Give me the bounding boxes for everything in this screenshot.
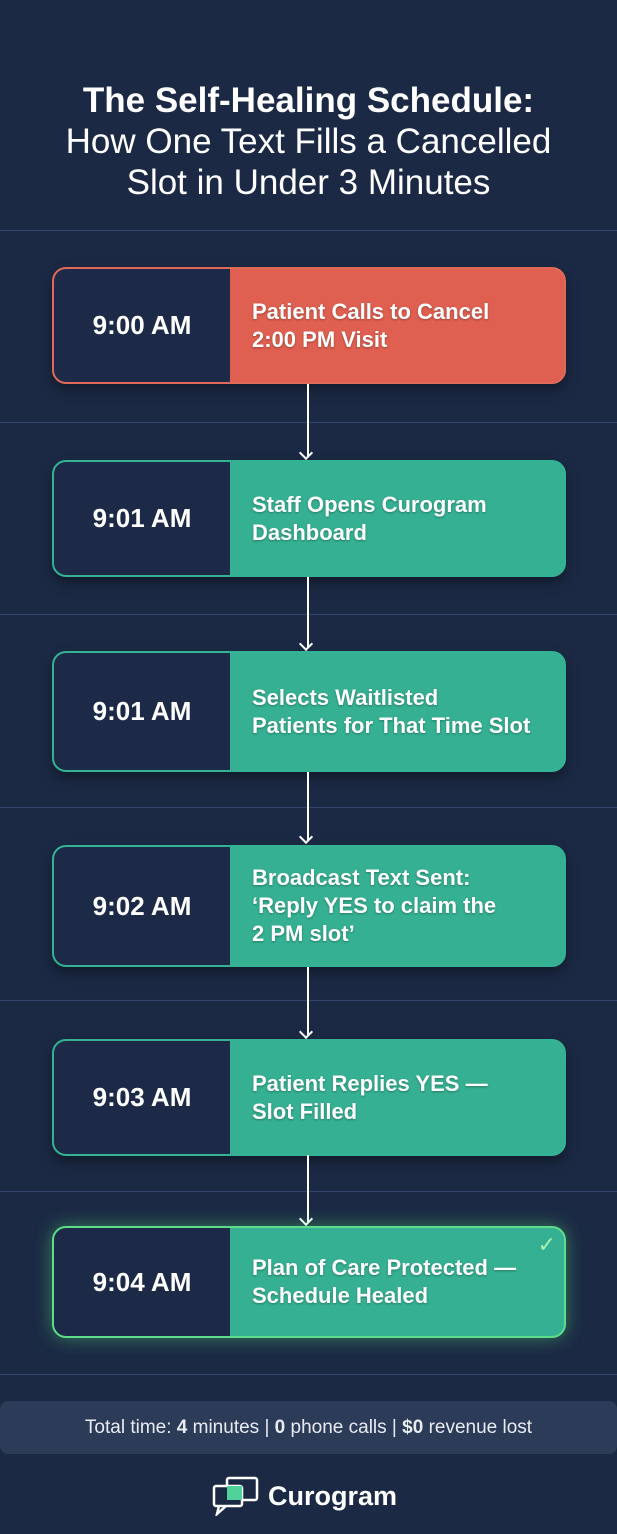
step 6: healed: Plan of Care Protected — bbox=[252, 1255, 516, 1280]
title: The Self-Healing Schedule: bbox=[83, 81, 534, 120]
summary bar: Total time: minutes | phone calls | revenue lost bbox=[85, 1416, 532, 1438]
logo: Curogram bbox=[268, 1480, 397, 1510]
title: How One Text Fills a Cancelled bbox=[66, 122, 551, 161]
step 2: 9:01 AM bbox=[93, 503, 191, 533]
step 3 bbox=[52, 651, 566, 772]
step 4: 2 PM slot’ bbox=[252, 921, 355, 946]
step 6: healed: Schedule Healed bbox=[252, 1283, 428, 1308]
step 5: 9:03 AM bbox=[93, 1082, 191, 1112]
step 2 bbox=[52, 460, 566, 577]
arrow 5 bbox=[307, 1155, 309, 1222]
step 1: cancel: 2:00 PM Visit bbox=[252, 326, 387, 352]
summary bar: 0 bbox=[275, 1416, 285, 1438]
summary bar bbox=[0, 1401, 617, 1454]
step 4: 9:02 AM bbox=[93, 890, 191, 920]
icon: chat bubbles bbox=[212, 1476, 258, 1516]
step 4: ‘Reply YES to claim the bbox=[252, 893, 496, 918]
arrow 3 bbox=[307, 772, 309, 840]
step 4 bbox=[52, 845, 566, 967]
icon: check: ✓ bbox=[538, 1232, 556, 1257]
arrow 4 bbox=[307, 967, 309, 1035]
step 5: Slot Filled bbox=[252, 1098, 357, 1124]
step 5: Patient Replies YES — bbox=[252, 1070, 488, 1096]
step 6: healed: 9:04 AM bbox=[93, 1266, 191, 1296]
step 3: Selects Waitlisted bbox=[252, 684, 438, 710]
step 6: healed bbox=[52, 1226, 566, 1338]
title bbox=[66, 81, 551, 202]
step 3: Patients for That Time Slot bbox=[252, 712, 530, 738]
step 1: cancel: 9:00 AM bbox=[93, 310, 191, 340]
arrow 2 bbox=[307, 577, 309, 647]
step 1: cancel bbox=[52, 267, 566, 384]
title: Slot in Under 3 Minutes bbox=[127, 163, 490, 202]
summary bar: 4 bbox=[177, 1416, 187, 1438]
step 5 bbox=[52, 1039, 566, 1156]
step 3: 9:01 AM bbox=[93, 696, 191, 726]
step 2: Staff Opens Curogram bbox=[252, 492, 487, 516]
logo bbox=[212, 1476, 397, 1516]
arrow 1 bbox=[307, 384, 309, 456]
step 2: Dashboard bbox=[252, 520, 367, 544]
summary bar: $0 bbox=[402, 1416, 423, 1438]
step 4: Broadcast Text Sent: bbox=[252, 865, 470, 890]
step 1: cancel: Patient Calls to Cancel bbox=[252, 298, 489, 324]
